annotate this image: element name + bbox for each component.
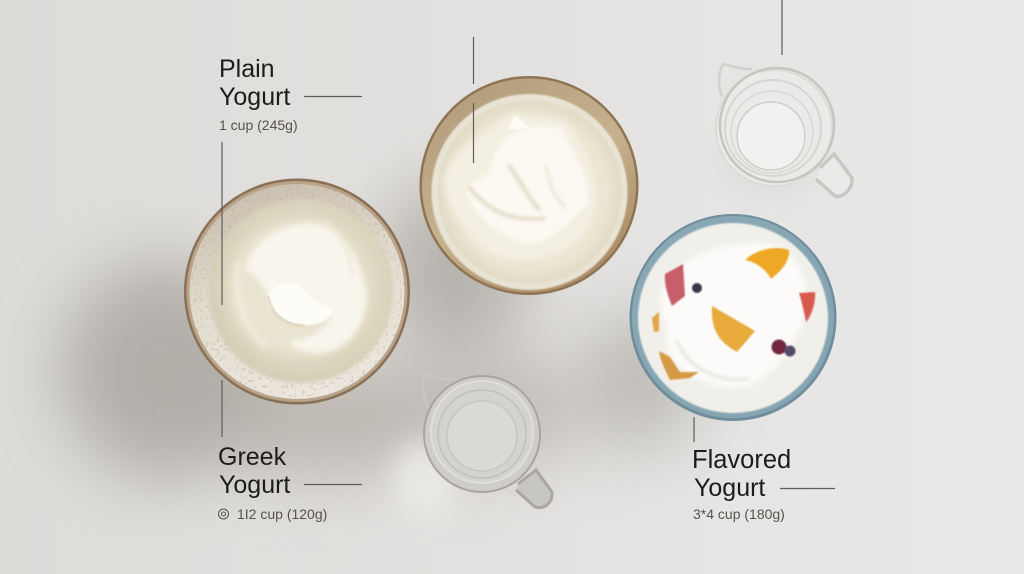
measuring cup: top right bbox=[716, 64, 852, 200]
yogurt peaks bbox=[444, 112, 596, 260]
yogurt swirl bbox=[230, 220, 367, 354]
label: Plain Yogurt: 1 cup (245g) bbox=[219, 117, 298, 133]
label: Greek Yogurt: 1I2 cup (120g) bbox=[237, 506, 327, 522]
label: Flavored Yogurt: Yogurt bbox=[694, 474, 765, 502]
label: Plain Yogurt bbox=[219, 55, 298, 133]
bowl: Greek yogurt, speckled ceramic bbox=[184, 178, 410, 404]
bowl: flavored yogurt, blue glaze bbox=[630, 214, 836, 421]
bowl: plain yogurt, tan ceramic bbox=[420, 76, 638, 295]
label: Plain Yogurt: Plain bbox=[219, 55, 275, 83]
label: Flavored Yogurt: Flavored bbox=[692, 446, 791, 474]
fruit pieces bbox=[652, 248, 815, 380]
label: Flavored Yogurt bbox=[692, 446, 791, 522]
label: Greek Yogurt bbox=[218, 443, 327, 522]
label: Flavored Yogurt: 3*4 cup (180g) bbox=[693, 506, 785, 522]
label: Plain Yogurt: Yogurt bbox=[219, 83, 290, 111]
measuring cup: bottom center bbox=[423, 375, 552, 508]
yogurt mound bbox=[661, 243, 807, 388]
label: Greek Yogurt: Greek bbox=[218, 443, 287, 471]
leader lines bbox=[222, 0, 835, 488]
label: Greek Yogurt: Yogurt bbox=[219, 471, 290, 499]
mound shading bbox=[676, 340, 750, 379]
